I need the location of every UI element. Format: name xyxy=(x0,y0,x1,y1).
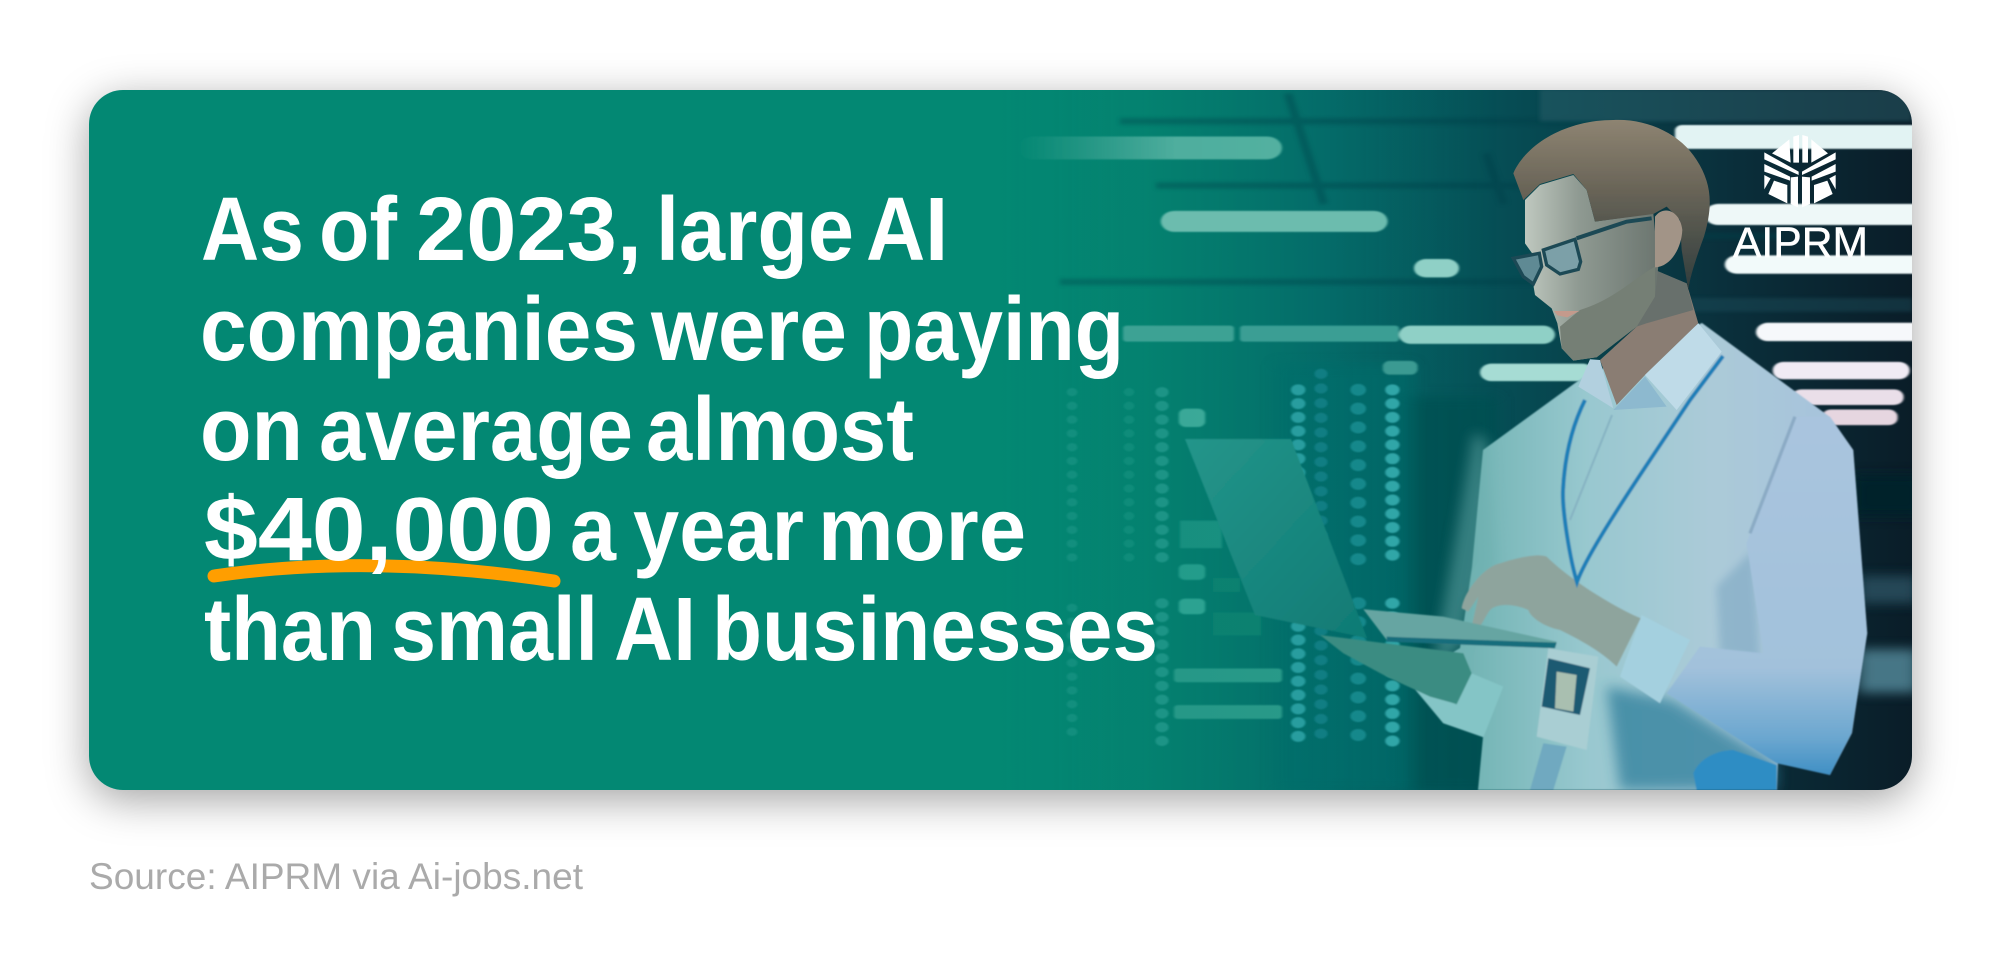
left hand under laptop xyxy=(1320,635,1472,704)
left sleeve cuff xyxy=(1418,674,1502,738)
headline: were xyxy=(650,280,847,380)
headline: on xyxy=(200,380,303,480)
headline: than xyxy=(204,580,376,680)
ceiling texture xyxy=(1540,89,1912,121)
collar xyxy=(1578,359,1613,408)
headline: AI xyxy=(614,580,696,680)
headline: paying xyxy=(864,280,1124,380)
dark ceiling beams xyxy=(1060,94,1912,305)
headline: companies xyxy=(200,280,638,380)
headline: As xyxy=(201,180,304,280)
torso shade under arm xyxy=(1717,550,1760,660)
laptop base xyxy=(1363,609,1557,648)
photo: data centre background xyxy=(1060,89,1924,791)
card shadow xyxy=(89,90,1912,790)
photo: head xyxy=(1513,120,1722,410)
sleeve seam xyxy=(1750,417,1795,533)
laptop lid xyxy=(1185,439,1367,638)
headline: small xyxy=(391,580,598,680)
headline: year xyxy=(633,480,804,580)
blue shirt patch xyxy=(1693,750,1777,790)
torso lower shade xyxy=(1607,687,1777,790)
panel: green card with photo xyxy=(89,89,1930,791)
right hand xyxy=(1462,555,1641,667)
headline xyxy=(200,180,1158,680)
beard xyxy=(1560,267,1655,361)
server rack lights xyxy=(1072,374,1392,748)
headline: businesses xyxy=(712,580,1158,680)
ear xyxy=(1655,210,1682,267)
green fade over background xyxy=(1066,281,1204,718)
rack panels xyxy=(1174,409,1282,719)
headline: of xyxy=(319,180,398,280)
card background xyxy=(89,90,1912,790)
glasses xyxy=(1513,218,1652,284)
headline: AI xyxy=(866,180,948,280)
shirt body xyxy=(1407,323,1867,790)
left underarm shade xyxy=(1433,433,1497,667)
headline: more xyxy=(818,480,1026,580)
badge xyxy=(1537,648,1598,750)
headline: $40,000 xyxy=(204,480,554,580)
neck shade xyxy=(1637,270,1693,327)
face xyxy=(1525,175,1658,361)
ceiling lights xyxy=(1018,125,1930,425)
lips xyxy=(1554,311,1579,317)
source note: Source: AIPRM via Ai-jobs.net xyxy=(89,856,584,897)
headline: 2023, xyxy=(416,180,642,280)
orange underline xyxy=(214,566,554,581)
lower placket xyxy=(1530,743,1567,790)
headline: almost xyxy=(646,380,914,480)
logo mark xyxy=(1764,135,1836,207)
headline: a xyxy=(570,480,617,580)
lanyard xyxy=(1563,356,1723,582)
logo: AIPRM xyxy=(1733,135,1868,267)
dark server racks xyxy=(1403,391,1912,788)
shirt placket xyxy=(1570,415,1612,520)
logo wordmark: AIPRM xyxy=(1733,219,1868,267)
headline: large xyxy=(656,180,854,280)
neck xyxy=(1600,270,1698,405)
right sleeve xyxy=(1667,417,1867,775)
headline: average xyxy=(319,380,633,480)
shirt cuff xyxy=(1620,615,1690,703)
photo: man with laptop xyxy=(1185,323,1867,790)
hair xyxy=(1513,120,1710,290)
laptop edge xyxy=(1387,637,1557,648)
